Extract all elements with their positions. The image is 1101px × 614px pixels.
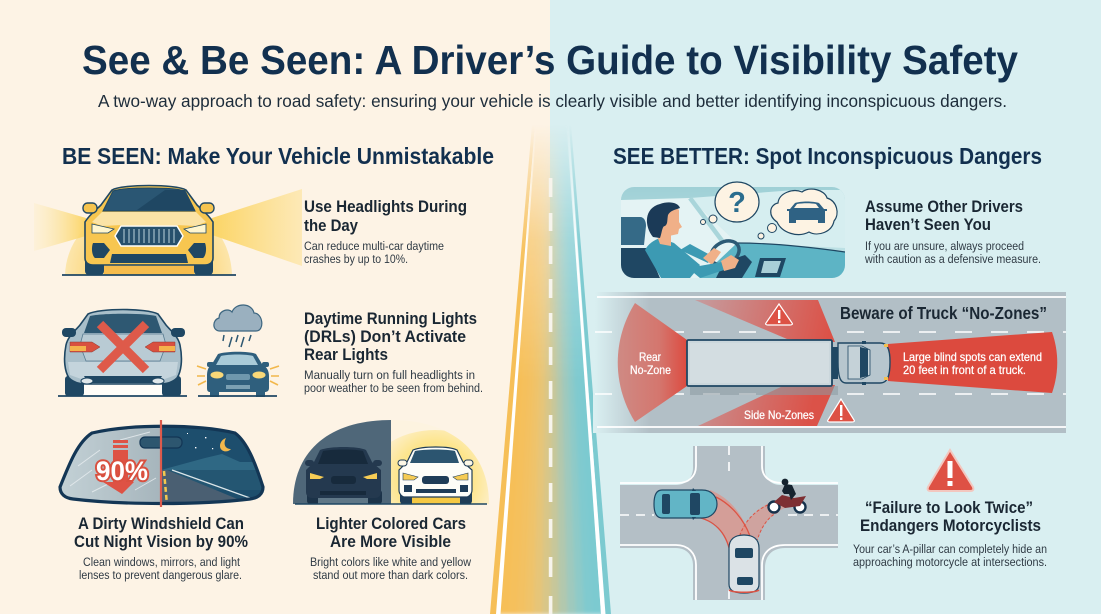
driver	[645, 238, 700, 278]
heading: see better: SEE BETTER: Spot Inconspicuous Dangers	[613, 143, 1042, 169]
text: use headlights during the day: Use Headlights During	[304, 197, 467, 216]
text: lighter colored cars: Bright colors like white and yellow	[310, 555, 471, 569]
truck shadow	[690, 386, 838, 395]
red X mark	[100, 324, 146, 370]
text: dirty windshield: A Dirty Windshield Can	[78, 514, 244, 533]
dark car	[305, 447, 382, 504]
text: use headlights during the day: Can reduce multi-car daytime	[304, 239, 444, 253]
thought bubble: car	[758, 189, 837, 239]
motorcycle	[768, 479, 806, 512]
text: assume other drivers: If you are unsure, always proceed	[865, 239, 1024, 253]
icon: dark car versus light car	[293, 420, 489, 505]
front blind spot	[888, 332, 1057, 393]
text: dirty windshield: lenses to prevent dangerous glare.	[79, 568, 242, 582]
thought bubble: question mark	[700, 182, 759, 224]
text: DRLs don't activate rear lights: (DRLs) Don’t Activate	[304, 327, 466, 346]
icon: large warning triangle	[928, 450, 973, 491]
icon: driver in car thinking	[621, 182, 845, 278]
text: use headlights during the day: crashes by up to 10%.	[304, 252, 408, 266]
front blind spot label: 20 feet in front of a truck.	[903, 363, 1026, 377]
rear no-zone	[618, 303, 687, 422]
warning sign top	[766, 304, 792, 325]
side no-zone bottom	[698, 385, 835, 426]
roads	[620, 446, 838, 600]
text: failure to look twice: approaching motorcycle at intersections.	[853, 555, 1047, 569]
text: lighter colored cars: Lighter Colored Cars	[316, 514, 466, 533]
text: dirty windshield: Cut Night Vision by 90%	[74, 532, 248, 551]
text: DRLs don't activate rear lights: Daytime Running Lights	[304, 309, 477, 328]
steering wheel	[710, 239, 741, 264]
side no-zone top	[695, 300, 835, 342]
icon: dirty windshield split dirty and clean	[58, 420, 265, 508]
rear no-zone label: Rear	[639, 350, 661, 364]
icon: rain cloud and small car with lights on	[197, 305, 279, 397]
light car	[398, 447, 473, 504]
text: assume other drivers	[864, 197, 1041, 266]
background: right pale blue half	[550, 0, 1101, 614]
title: See & Be Seen: A Driver’s Guide to Visibility Safety	[82, 37, 1018, 83]
text: failure to look twice: Endangers Motorcyclists	[860, 516, 1041, 535]
panel: truck no-zones road diagram	[593, 292, 1066, 433]
text: assume other drivers: Assume Other Drivers	[865, 197, 1023, 216]
moon	[220, 438, 231, 451]
text: lighter colored cars: stand out more than dark colors.	[313, 568, 468, 582]
text: failure to look twice: “Failure to Look Twice”	[865, 498, 1033, 517]
text: use headlights during the day	[304, 197, 467, 266]
road surface	[593, 292, 1066, 433]
front blind spot label: Large blind spots can extend	[903, 350, 1042, 364]
truck heading: Beware of Truck “No-Zones”	[840, 303, 1047, 323]
text: dirty windshield: Clean windows, mirrors, and light	[83, 555, 241, 569]
teal car	[654, 488, 717, 520]
text: DRLs don't activate rear lights: Manually turn on full headlights in	[304, 368, 475, 382]
icon: grey car rear with red X	[58, 310, 187, 396]
text: DRLs don't activate rear lights	[304, 309, 483, 395]
text: failure to look twice: Your car’s A-pillar can completely hide an	[853, 542, 1047, 556]
seat	[621, 217, 646, 245]
text: lighter colored cars: Are More Visible	[330, 532, 451, 551]
arms	[681, 244, 708, 263]
text: DRLs don't activate rear lights: poor weather to be seen from behind.	[304, 381, 483, 395]
white car	[729, 535, 759, 593]
icon: intersection with car and motorcycle	[620, 446, 838, 600]
thought bubble: question mark: ?	[728, 187, 746, 219]
side no-zones label: Side No-Zones	[744, 408, 814, 422]
icon: yellow car with headlight beams	[34, 186, 302, 275]
text: DRLs don't activate rear lights: Rear Lights	[304, 345, 388, 364]
text: assume other drivers: with caution as a defensive measure.	[864, 252, 1041, 266]
rear no-zone label	[630, 350, 671, 377]
subtitle: A two-way approach to road safety: ensuring your vehicle is clearly visible and better identifying inconspicuous dangers.	[98, 91, 1007, 111]
text: assume other drivers: Haven’t Seen You	[865, 215, 991, 234]
red down arrow with 90 percent: 90%	[96, 456, 148, 486]
dashboard	[700, 243, 845, 278]
sight lines	[694, 490, 750, 552]
text: use headlights during the day: the Day	[304, 216, 358, 235]
red down arrow with 90 percent	[96, 440, 148, 494]
central road graphic	[490, 125, 611, 614]
rear no-zone label: No-Zone	[630, 363, 671, 377]
text: lighter colored cars	[310, 514, 471, 582]
truck	[687, 340, 890, 386]
warning sign bottom	[828, 399, 854, 422]
text: failure to look twice	[853, 498, 1047, 569]
text: dirty windshield	[74, 514, 248, 582]
background: left cream half	[0, 0, 550, 614]
front blind spot label	[903, 350, 1042, 377]
heading: be seen: BE SEEN: Make Your Vehicle Unmistakable	[62, 143, 494, 169]
